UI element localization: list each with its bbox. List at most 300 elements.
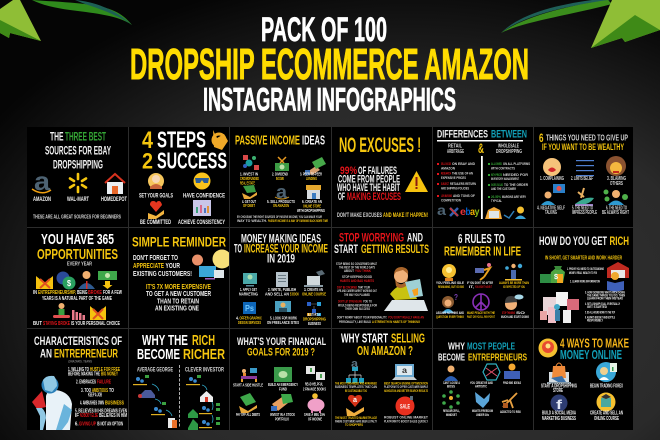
labels row 1	[540, 176, 626, 187]
labels row 1: 2. LIMITS BELIEF	[571, 176, 593, 182]
logos: amazon, cross, ebay: a	[470, 207, 475, 218]
labels row 2: INVEST IN A STOCK	[270, 412, 295, 417]
icon: idea circle	[538, 338, 558, 358]
heading: GOALS FOR 2019 ?	[247, 346, 315, 358]
icon: network dots	[442, 390, 460, 409]
heading: ENTREPRENEURS	[468, 352, 527, 364]
labels row 1: REAL ESTATE	[240, 180, 255, 186]
text block: APPRECIATE	[133, 261, 164, 270]
labels row 1: 2 FINANCE BOOKS	[303, 386, 326, 392]
column: retail arbitrage: AMAZON	[441, 166, 455, 170]
text block	[133, 253, 192, 278]
logos: amazon, cross, ebay	[437, 202, 480, 218]
icon: always right	[604, 190, 628, 205]
title line 1: PACK OF 100	[261, 11, 387, 49]
list: 4. AMBUSHES OWN	[80, 400, 104, 406]
labels row 2: 4.	[236, 316, 239, 320]
illustration: man with phone	[32, 376, 72, 430]
handle: @MAZARIS_TEAMS	[68, 360, 92, 364]
icon: cash and arrow	[98, 271, 117, 289]
icon: hand money	[305, 157, 326, 175]
labels row 2: IMPRESS PEOPLE	[572, 210, 597, 216]
heading: REMEMBER IN LIFE	[444, 244, 521, 258]
heading	[45, 130, 111, 172]
list: IS NOT AN OPTION	[97, 422, 123, 428]
logos: amazon, cross, ebay: b	[466, 207, 470, 218]
footer: DON'T WORRY ABOUT YOUR PERSONALITY.	[337, 316, 387, 320]
heading: THE	[50, 130, 64, 144]
footer: BUT	[33, 321, 42, 327]
statement: OF	[338, 191, 345, 203]
body text	[33, 290, 122, 302]
footer: YOU DON'T REALLY HAVE AN	[388, 316, 424, 320]
icon: online course	[596, 392, 616, 412]
labels row 2: WANTS FREEDOM	[472, 409, 493, 413]
icon: reader	[504, 364, 520, 379]
text block	[567, 267, 604, 284]
heading: 4	[142, 127, 154, 154]
labels row 2: ONLINE COURSE	[594, 416, 619, 422]
text block: THE SAME THINGS YOU DO. THEN	[587, 294, 625, 298]
icon labels: HOMEDEPOT	[101, 196, 127, 203]
logos: amazon, cross, ebay: y	[474, 207, 480, 218]
labels: HAVE CONFIDENCE	[183, 192, 225, 200]
text block: 1. PROVE YOU NEED TO OUTSTANDING	[567, 267, 604, 271]
column: wholesale dropshipping: AND THE CUSTOMER	[491, 186, 516, 191]
icon: sale badge: SALE	[400, 404, 410, 410]
heading	[137, 332, 225, 363]
icon: finance books	[306, 366, 325, 380]
heading	[234, 234, 328, 266]
column: retail arbitrage: ON EBAY AND	[452, 161, 475, 166]
text block: YOU THINK	[355, 269, 371, 273]
icon: org chart: a	[351, 358, 359, 370]
footer	[237, 214, 328, 223]
labels row 1: IT,	[469, 284, 474, 289]
labels row 2: BUILD A SOCIAL MEDIA	[542, 411, 576, 417]
heading: DROPSHIPPING	[53, 158, 103, 172]
icon: debt hand	[242, 185, 257, 199]
heading: ENTREPRENEUR	[54, 346, 118, 360]
text block: LIFE AND CAREER AREN'T WORKING OUT	[337, 289, 377, 293]
panel: passive income ideas	[230, 127, 331, 227]
statement: COME FROM PEOPLE	[338, 174, 400, 186]
footer: THESE ARE ALL GREAT SOURCES FOR BEGINNERS	[33, 214, 121, 220]
icon: angry woman	[606, 156, 626, 176]
icon: crying baby	[543, 158, 561, 176]
icon: podium	[505, 264, 522, 280]
body text: IN	[33, 290, 37, 296]
text block: EXISTING CUSTOMERS!	[133, 269, 192, 278]
list: HUSTLE FOR FREE	[90, 367, 120, 373]
labels row 2: ON FREELANCE SITES	[267, 320, 299, 325]
text blocks row 1: BE CUSTOMIZABLE TOO	[345, 389, 367, 393]
heading: TO	[234, 244, 242, 256]
column: retail arbitrage	[441, 144, 476, 202]
footer: PASSIVE INCOME IS A WAY OF EARNING BACK MORE TIME	[268, 218, 328, 223]
labels row 1: FIND BIG IDEAS	[503, 381, 521, 385]
text block: 6. ALWAYS BUDGET AND BOTTLE	[585, 316, 615, 320]
labels row 2: OFFER GRAPHIC	[240, 316, 262, 320]
text block: THE REST OF THE WORLD SAYS	[339, 266, 375, 270]
labels row 1: FUND	[279, 386, 287, 392]
panel: 6 rules	[433, 228, 533, 328]
labels row 2: RESOURCEFUL,	[443, 409, 460, 413]
labels row 1: YOU WON'T HAVE IT	[475, 284, 492, 289]
icon: forex trader	[596, 362, 617, 382]
labels row 2: 5. LOOK FOR WORK	[270, 316, 297, 320]
icon: piggy bank	[308, 393, 324, 413]
heading	[334, 233, 429, 256]
icon: sunglasses emoji	[194, 172, 210, 190]
heading: 6 RULES TO	[458, 232, 505, 246]
statement: MAKING EXCUSES	[347, 191, 401, 203]
labels row 2	[537, 206, 629, 216]
column: wholesale dropshipping: TYPICAL	[491, 198, 502, 203]
text block: DON'T FORGET TO	[133, 253, 178, 262]
labels row 2: 6. THE NEED TO	[606, 206, 627, 212]
labels row 1: 2. DIVIDEND	[272, 172, 288, 176]
heading: START	[334, 244, 358, 256]
icon: ebook	[276, 272, 288, 287]
icon: leaping person	[502, 393, 517, 408]
labels row 1: 3. PEER-TO-PEER	[300, 172, 322, 176]
icon labels: AMAZON	[33, 196, 51, 203]
labels	[139, 192, 225, 226]
labels row 1: CAN'T LOOSE A	[443, 381, 460, 385]
icon: money bags: $	[554, 274, 558, 281]
panel: 4 ways to make money online	[534, 329, 633, 430]
labels row 2: 6. CREATE AN	[302, 199, 322, 204]
icon: facebook: f	[556, 397, 563, 412]
heading: ON AMAZON ?	[357, 344, 413, 358]
heading: MOST PEOPLE	[467, 340, 515, 352]
text block: DON'T LET STRUGGLING	[338, 300, 362, 304]
heading: RICHER	[183, 346, 225, 363]
heading: HOW DO YOU GET	[539, 234, 607, 248]
labels row 1: LENDING	[306, 176, 317, 181]
icon: businessman	[444, 366, 458, 381]
icon: limits lines	[576, 160, 594, 176]
statement: WHO HAVE THE HABIT	[337, 182, 400, 194]
icon: online course	[304, 270, 325, 287]
column: retail arbitrage: SUBJECT	[441, 181, 449, 186]
text block	[585, 290, 625, 322]
body text: BROKE	[88, 290, 103, 296]
text block: YOU TO	[363, 300, 372, 304]
icon: dove	[475, 392, 490, 408]
icon: heart hand: a	[353, 397, 357, 404]
labels row 2: ONLINE STORE	[303, 204, 321, 208]
labels row 1: ARTISTIC	[475, 384, 487, 388]
labels row 1	[240, 172, 322, 186]
labels row 2: MARKETING BUSINESS	[542, 416, 576, 422]
heading: MONEY MAKING IDEAS	[241, 234, 321, 246]
labels row 2	[242, 199, 325, 213]
panel: three best sources	[27, 127, 128, 227]
divider	[481, 156, 483, 219]
labels row 1: START A DROPSHIPPING	[541, 384, 577, 390]
labels row 1: REMAINING, BUT GO BIG	[438, 284, 464, 289]
labels row 2: PAY OFF ALL DEBTS	[236, 412, 260, 417]
panel: why most people become entrepreneurs	[433, 329, 533, 430]
icon: reader	[607, 262, 629, 292]
text blocks row 1: THE MOST ORGANIZED AND ARRANGED	[335, 382, 377, 386]
heading	[237, 336, 326, 358]
body text: BEING	[77, 290, 88, 296]
icon: peace sign	[473, 294, 489, 310]
statement: OF FAILURES	[358, 165, 397, 177]
heading: WHY THE	[142, 332, 188, 349]
diagram: average george	[133, 375, 177, 428]
panel: 4 steps 2 success	[129, 126, 229, 227]
text block	[146, 282, 211, 312]
labels row 2: MAKE PEACE WITH THE	[467, 310, 495, 315]
footer: AND MAKE IT HAPPEN!	[383, 213, 428, 219]
labels row 1: E-BOOK	[290, 292, 299, 296]
heading	[37, 231, 118, 268]
body text: ENTREPRENEURSHIP,	[38, 290, 76, 296]
heading: NO EXCUSES !	[339, 134, 421, 157]
heading: CHARACTERISTICS OF	[34, 334, 122, 348]
icon: side hustle	[241, 368, 257, 382]
labels row 1: 1. COMPLAINING	[540, 176, 564, 182]
heading: BETWEEN	[491, 128, 527, 140]
text blocks row 2: TO SHOPPERS	[345, 423, 363, 427]
footer: DON'T MAKE EXCUSES	[337, 213, 382, 219]
text blocks row 1	[335, 382, 428, 393]
heading: IN 2019	[267, 254, 295, 266]
labels row 1: BOSS	[447, 384, 456, 388]
icon: dividend	[275, 157, 289, 171]
icon: marketing screen	[243, 273, 257, 286]
heading	[341, 332, 425, 358]
icon: broke sign small	[90, 306, 106, 320]
icons: warehouse, check, person	[485, 206, 526, 219]
column: wholesale dropshipping	[437, 144, 530, 203]
text blocks row 2	[335, 416, 429, 427]
labels row 2: ASSUME NOTHING AND	[436, 310, 464, 315]
text block: IT'S 7X MORE EXPENSIVE	[146, 282, 211, 291]
list: 5. BELIEVES IN HIS DREAMS EVEN	[75, 408, 127, 414]
list: BEFORE MAKING THE	[68, 372, 100, 378]
labels row 1: 1. APPLY GET	[240, 287, 257, 292]
list: AMBITIOUS	[92, 388, 108, 394]
heading: DIFFERENCES	[437, 128, 488, 140]
heading	[438, 340, 527, 364]
labels row 1	[239, 287, 326, 296]
heading	[34, 334, 122, 360]
text blocks row 1: NAVIGATION AND BETTER SEARCH RESULTS	[384, 389, 428, 393]
text blocks row 1: BUSINESS TEMPLATES THAT CAN	[335, 385, 377, 389]
labels row 2: PORTFOLIO	[275, 416, 289, 422]
heading: BECOME	[438, 352, 465, 364]
text blocks row 2: PLATFORM TO BOOST SALES QUICKLY	[384, 420, 428, 424]
heading	[444, 232, 521, 258]
column: wholesale dropshipping: WHOLESALE	[498, 144, 519, 150]
labels row 1: INCOME	[276, 176, 284, 181]
list: BIG MONEY	[101, 372, 118, 378]
labels row 2: MUCH AND START DOING	[501, 314, 529, 319]
labels row 1: 2. WRITE, PUBLISH	[268, 287, 296, 292]
labels row 2: 5. THE NEED TO	[572, 206, 593, 212]
list: 6.	[75, 422, 79, 428]
heading	[560, 336, 629, 362]
icon: broke sign	[36, 276, 53, 289]
labels row 2: DROPSHIPPING	[303, 316, 326, 322]
heading: WHY	[448, 340, 465, 352]
icon: amazon products: a	[276, 182, 288, 202]
icon: negative talk	[541, 184, 565, 205]
panel: simple reminder	[129, 228, 232, 328]
heading: EVERY YEAR	[67, 262, 92, 268]
heading: THREE BEST	[65, 130, 106, 144]
labels: ACHIEVE CONSISTENCY	[178, 219, 225, 226]
labels row 1: YOU CREATIVE AND	[470, 381, 493, 385]
heading: STOP WORRYING	[339, 233, 404, 245]
labels row 2: 4. GET OUT	[242, 199, 256, 204]
leaves top right	[501, 0, 660, 48]
icon: warning triangle	[405, 171, 428, 192]
labels row 1	[541, 384, 623, 394]
footer: IS YOUR PERSONAL CHOICE	[71, 321, 120, 327]
footer	[337, 316, 424, 324]
heading: RICH	[192, 332, 215, 349]
panel: 365 opportunities	[27, 228, 128, 328]
footer: STAYING BROKE	[43, 321, 70, 327]
labels row 2: DESIGN SERVICES	[238, 320, 261, 325]
illustration: people and city	[540, 292, 579, 323]
text blocks row 1: BEST SEARCH ENGINE OPTIMIZATION	[384, 382, 428, 386]
column: wholesale dropshipping: MARGINS ARE VERY	[502, 194, 526, 199]
icon: creative hexagon	[483, 364, 500, 380]
heading: SOURCES FOR EBAY	[45, 144, 111, 158]
labels row 1: MARKETING	[239, 292, 258, 296]
heading: WHY START	[341, 332, 388, 346]
icon labels: WAL-MART	[67, 196, 89, 203]
labels row 1: IF YOU DON'T GO AFTER	[467, 280, 493, 285]
column: retail arbitrage: SELL GOODS	[441, 161, 451, 166]
text block: WOULD BEING RESPONSIBLE FOR	[338, 304, 377, 308]
icon: house	[105, 174, 125, 194]
labels row 2: BUSINESS	[308, 321, 321, 326]
grid backing	[27, 127, 633, 430]
text blocks row 2: THE MOST TRUSTED MARKETPLACE	[335, 416, 377, 420]
column: retail arbitrage: AND SHIPPING POLICIES	[441, 186, 469, 190]
text block: THEIR OWN SUCCESS	[345, 307, 370, 311]
column: retail arbitrage: AND TONS OF	[453, 193, 475, 198]
logos: amazon, cross, ebay: e	[460, 207, 466, 218]
text block: THAT YOUR	[358, 286, 370, 290]
icon: surfer	[575, 188, 594, 206]
text blocks row 2: WHERE CUSTOMERS HAVE BEEN LOYALTY	[335, 420, 377, 424]
heading: IDEAS	[302, 132, 325, 148]
list: 1. WILLING TO	[68, 367, 89, 373]
icon: amazon laptop: a	[402, 366, 408, 375]
column: wholesale dropshipping: GOES SOLID	[491, 182, 503, 187]
icon: pay off debts	[239, 393, 257, 413]
statement	[337, 165, 401, 203]
footer: BY CHOOSING THE RIGHT SOURCES OF PASSIVE INCOME, YOU CAN MAKE YOUR	[237, 214, 322, 219]
heading: 2	[142, 149, 153, 174]
icon: woman question: ?	[454, 293, 458, 302]
icon: photoshop: Ps	[245, 304, 254, 313]
list	[68, 367, 127, 428]
diagram: clever investor	[186, 375, 220, 430]
column: wholesale dropshipping: 20-50%	[491, 194, 501, 199]
column: retail arbitrage: RETAIL	[448, 144, 462, 150]
text block: 3. HOW SOMEONE WHO'S RICH DOING	[585, 290, 625, 294]
heading: RICH	[610, 234, 629, 248]
icon: falling bars	[72, 310, 85, 320]
footer: A STRENGTH IN HABITS OF THINKING	[372, 320, 420, 324]
column: wholesale dropshipping: NEEDED FOR	[503, 172, 528, 177]
panel: how do you get rich	[534, 228, 633, 328]
footer: WAY TO WEALTH.	[237, 218, 267, 223]
labels row 2: OF DEBT	[243, 203, 255, 208]
panel: financial goals	[230, 329, 331, 430]
column: wholesale dropshipping: INVENTORY MANAGEMENT	[491, 176, 519, 181]
column: retail arbitrage: ARBITRAGE	[447, 149, 464, 155]
column: retail arbitrage: RETAILERS RETURN	[450, 181, 476, 186]
column: retail arbitrage: THE USE OF AN	[452, 170, 473, 176]
icon: freelancer screen	[275, 301, 291, 312]
column: wholesale dropshipping: WITH PRICES	[491, 172, 502, 177]
heading: SIMPLE REMINDER	[132, 234, 226, 250]
divider	[178, 365, 180, 428]
panel: differences between	[433, 127, 533, 227]
panel: stop worrying	[332, 228, 432, 328]
panel: characteristics of an entrepreneur	[27, 329, 128, 430]
labels: BE COMMITTED	[140, 219, 171, 226]
icon: dropshipping store	[547, 363, 571, 384]
logos: amazon, cross, ebay: a	[437, 202, 446, 218]
icon: businessman	[78, 271, 95, 289]
list: 2. EMBRACES	[76, 380, 96, 386]
labels row 1: BEGIN TRADING FOREX	[590, 384, 623, 390]
column: retail arbitrage: LOW MARGINS	[441, 193, 452, 198]
heading: OPPORTUNITIES	[37, 246, 118, 263]
labels row 2: WITH DROPSHIPPING	[297, 208, 325, 213]
list: BUSINESS	[105, 400, 124, 406]
icon: stock portfolio	[271, 394, 293, 411]
labels row 2: ON AMAZON	[273, 203, 289, 208]
labels row 2: STOP THINKING	[502, 310, 515, 315]
column: wholesale dropshipping: TO THE ORDER	[504, 182, 528, 187]
column: retail arbitrage: COMPETITION	[441, 198, 461, 202]
icon: worried man with book	[384, 267, 428, 311]
icon: heart hand	[148, 201, 164, 219]
title line 3: INSTAGRAM INFOGRAPHICS	[203, 82, 456, 118]
heading: WHAT'S YOUR FINANCIAL	[237, 336, 326, 348]
text block: YOUR	[166, 261, 180, 270]
text block: TO GET A NEW CUSTOMER	[146, 289, 211, 298]
icon: chart	[193, 200, 211, 216]
heading: MONEY ONLINE	[560, 348, 622, 362]
labels row 2: SO	[516, 310, 525, 315]
icon: store	[306, 185, 321, 199]
text block: HABITS AND BAD HABITS	[340, 279, 374, 283]
heading: YOU HAVE 365	[41, 231, 114, 248]
labels row 1: IS EXPECTED OF YOU	[503, 284, 525, 289]
list: 3. TOO	[81, 388, 91, 394]
labels row 2: 5. SELL PRODUCTS	[267, 199, 295, 204]
icon: person	[148, 173, 164, 189]
text block: 4. SET A SHARP GOAL. EVENTUALLY	[585, 302, 620, 306]
ampersand: &	[478, 140, 484, 156]
text blocks row 2: ROBUST ONLINE MARKET	[384, 416, 429, 420]
text block: RESPONSIBLY	[587, 318, 603, 322]
